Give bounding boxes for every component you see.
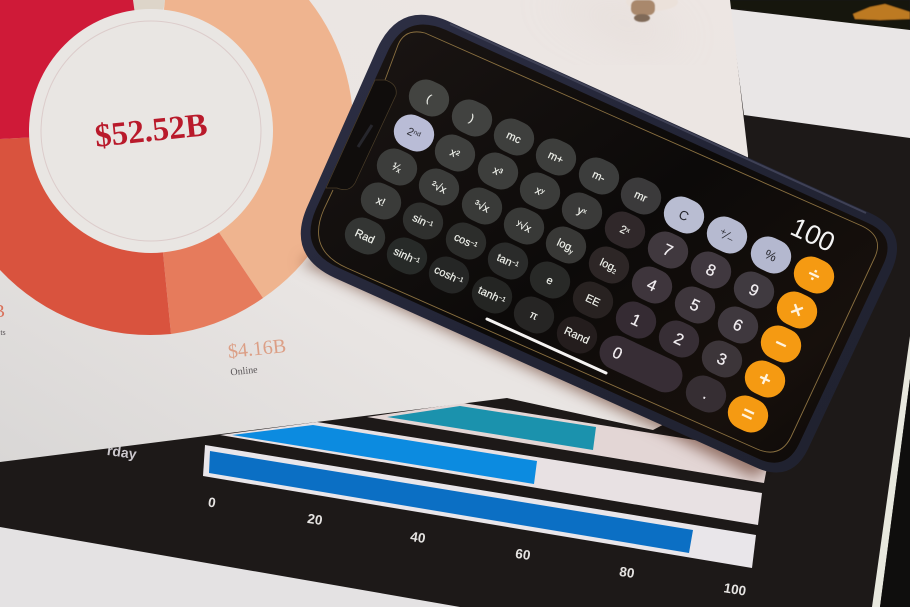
row 4 keys — [355, 177, 791, 403]
display value: 100 — [786, 212, 840, 258]
row 5 keys: 0 — [609, 344, 625, 364]
row 4 keys: tan — [495, 252, 514, 269]
darker area right of strip — [880, 379, 910, 607]
row 4 keys: 3 — [714, 350, 729, 370]
keypad — [339, 74, 840, 438]
row 4 keys: sin — [410, 212, 428, 229]
phone — [301, 15, 897, 473]
top right white paper — [730, 9, 910, 138]
row 3 keys: ʸ√x — [513, 218, 533, 236]
row 4 keys: e — [544, 274, 555, 288]
row 2 keys: y — [540, 188, 546, 196]
row 2 keys: y — [575, 205, 585, 218]
top ornament — [626, 0, 678, 22]
row 1 keys: ) — [467, 113, 476, 125]
row 4 keys: + — [754, 366, 775, 392]
row 3 keys: 5 — [687, 296, 702, 316]
bar: teal top — [367, 403, 770, 483]
row 3 keys: ²√x — [429, 179, 448, 197]
row 4 keys: cos — [452, 231, 473, 249]
row 2 keys: nd — [412, 129, 422, 139]
row 1 keys: m+ — [546, 149, 565, 167]
row 3 keys: log — [555, 237, 573, 254]
row 4 keys: 1 — [628, 311, 643, 331]
center circle — [29, 9, 273, 253]
row 2 keys: x³ — [491, 165, 505, 179]
axis labels: 40 — [409, 529, 427, 546]
row 3 keys: 6 — [730, 316, 745, 336]
top right dark strip — [728, 0, 910, 32]
screen gold edge — [319, 32, 878, 452]
row 5 keys: Rand — [562, 325, 591, 347]
row 5 keys: cosh — [432, 264, 458, 285]
row 1 keys: C — [676, 207, 691, 224]
row 2 keys: 2 — [405, 126, 416, 139]
row 4 keys: −1 — [510, 259, 520, 269]
center ring — [41, 21, 261, 241]
row 4 keys: x! — [374, 195, 387, 209]
row 5 keys: −1 — [455, 275, 465, 284]
row 3 keys: y — [568, 248, 574, 256]
row 3 keys: ³√x — [472, 198, 491, 216]
notch — [326, 80, 396, 190]
row 4 keys: −1 — [425, 219, 435, 228]
row 3 keys: 2 — [611, 268, 617, 276]
row 2 keys: 2 — [618, 223, 628, 237]
row 2 keys: 9 — [746, 281, 761, 301]
cropped caption left: ts — [0, 328, 6, 337]
bar chart — [106, 403, 770, 599]
row 4 keys: EE — [583, 292, 602, 309]
row 1 keys: % — [762, 246, 780, 265]
row 3 keys: ¹⁄ₓ — [390, 161, 404, 175]
axis labels: 20 — [306, 511, 324, 528]
phone shadow — [300, 250, 775, 478]
segment caption $4.16B: $4.16B — [227, 335, 287, 363]
segment: salmon — [151, 131, 263, 334]
row 5 keys: . — [700, 386, 711, 403]
row 3 keys: 4 — [644, 276, 659, 296]
row 1 keys: ( — [424, 93, 433, 105]
row 2 keys: x — [533, 185, 543, 198]
segment caption Online: Online — [230, 365, 259, 378]
row 5 keys — [339, 212, 774, 438]
donut chart — [0, 0, 353, 335]
segment: crimson — [0, 0, 151, 139]
screen — [311, 25, 888, 463]
row 5 keys: tanh — [476, 284, 500, 304]
row 2 keys: x² — [448, 147, 462, 161]
segment: orange red — [0, 131, 171, 335]
white lower left sheet area — [0, 527, 460, 607]
segment: beige — [133, 0, 165, 30]
row 4 keys: −1 — [469, 239, 479, 249]
row 1 keys: mr — [632, 189, 649, 205]
row 5 keys: sinh — [392, 246, 415, 265]
row 5 keys: −1 — [497, 294, 507, 304]
row 3 keys — [371, 143, 807, 368]
row 2 keys: × — [786, 297, 807, 323]
home indicator — [487, 319, 606, 373]
row 5 keys: π — [528, 309, 540, 323]
row 2 keys: 8 — [703, 261, 718, 281]
axis labels — [207, 494, 747, 599]
bar: middle blue — [220, 422, 762, 525]
segment: peach — [151, 0, 353, 298]
row 1 keys: ÷ — [804, 263, 824, 289]
axis labels: 80 — [618, 564, 636, 581]
sheet edge strip — [872, 336, 910, 607]
row 1 keys: ⁺∕₋ — [716, 225, 737, 246]
row 2 keys: 7 — [660, 241, 675, 261]
axis labels: 0 — [207, 494, 217, 510]
axis labels: 60 — [514, 546, 532, 563]
phone case — [301, 15, 897, 473]
row 2 keys: x — [625, 227, 632, 235]
row 2 keys: x — [582, 208, 588, 216]
row 1 keys — [403, 74, 840, 299]
axis labels: 100 — [723, 580, 747, 599]
row 3 keys: − — [770, 331, 791, 357]
row 5 keys: = — [737, 401, 758, 427]
row 1 keys: m- — [590, 169, 607, 185]
case highlight — [450, 24, 866, 213]
bar: bottom blue — [203, 445, 756, 568]
row 3 keys: log — [598, 257, 616, 274]
cropped caption left — [0, 301, 6, 337]
row 5 keys: −1 — [412, 255, 422, 265]
main white paper — [0, 0, 748, 462]
day label: rday — [106, 442, 138, 462]
paper shading — [540, 0, 690, 50]
speaker — [358, 125, 372, 147]
center value: $52.52B — [93, 107, 209, 155]
row 4 keys: 2 — [671, 330, 686, 350]
row 1 keys: mc — [504, 129, 523, 147]
row 5 keys: Rad — [353, 227, 376, 247]
row 2 keys — [388, 109, 823, 334]
